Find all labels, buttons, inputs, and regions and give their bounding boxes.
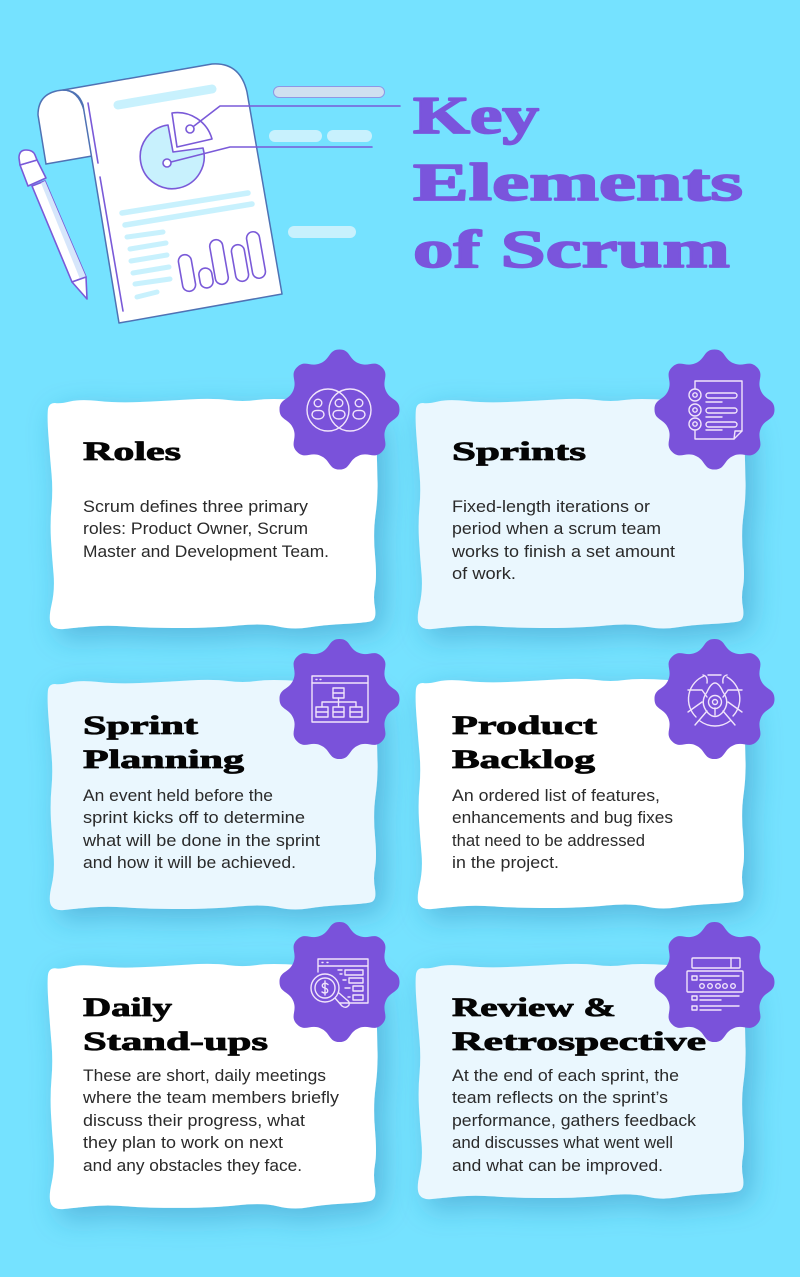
heading: Retrospective bbox=[452, 1027, 706, 1056]
heading: Backlog bbox=[452, 745, 595, 774]
panel: daily stand-ups bbox=[48, 922, 399, 1209]
icon: star rating form bbox=[654, 922, 774, 1042]
pencil bbox=[19, 150, 87, 299]
body text: that need to be addressed bbox=[452, 832, 645, 850]
body text: roles: Product Owner, Scrum bbox=[83, 520, 308, 538]
title bbox=[413, 87, 743, 279]
body text: and discusses what went well bbox=[452, 1134, 673, 1152]
panel: product backlog bbox=[416, 639, 774, 909]
body text: Fixed-length iterations or bbox=[452, 498, 651, 516]
icon: sitemap window bbox=[280, 639, 400, 759]
bar chart bbox=[177, 231, 266, 292]
icon: bug in target bbox=[654, 639, 774, 759]
body text: Master and Development Team. bbox=[83, 543, 329, 561]
illustration: report document and pencil bbox=[19, 64, 400, 323]
heading: Product bbox=[452, 711, 598, 740]
body text: At the end of each sprint, the bbox=[452, 1067, 679, 1085]
panel: sprints bbox=[416, 350, 774, 629]
body text: they plan to work on next bbox=[83, 1134, 283, 1152]
card background bbox=[48, 680, 378, 910]
heading: Roles bbox=[83, 437, 181, 466]
leader lines bbox=[163, 106, 400, 167]
decorative pills bbox=[269, 86, 384, 238]
heading: Review & bbox=[452, 993, 616, 1022]
pie chart bbox=[140, 113, 212, 189]
heading: Daily bbox=[83, 993, 172, 1022]
heading bbox=[452, 711, 598, 774]
panel: sprint planning bbox=[48, 639, 399, 910]
body text: what will be done in the sprint bbox=[82, 832, 320, 850]
body text bbox=[83, 498, 329, 561]
body text: works to finish a set amount bbox=[451, 543, 675, 561]
title: Elements bbox=[413, 154, 743, 212]
body text: These are short, daily meetings bbox=[83, 1067, 326, 1085]
paper bbox=[38, 64, 282, 323]
body text: in the project. bbox=[452, 854, 559, 872]
panel: roles bbox=[48, 350, 399, 629]
heading: Stand-ups bbox=[83, 1027, 268, 1056]
card background bbox=[416, 679, 746, 909]
panel: review and retrospective bbox=[416, 922, 774, 1199]
body text: team reflects on the sprint’s bbox=[452, 1089, 668, 1107]
icon: overlapping people bbox=[280, 350, 400, 470]
body text: and how it will be achieved. bbox=[83, 854, 296, 872]
card background bbox=[416, 399, 746, 629]
body text: An ordered list of features, bbox=[452, 787, 660, 805]
body text bbox=[452, 787, 673, 872]
body text: and any obstacles they face. bbox=[83, 1157, 302, 1175]
icon: checklist document bbox=[654, 350, 774, 470]
body text: discuss their progress, what bbox=[83, 1112, 305, 1130]
body text bbox=[452, 1067, 697, 1175]
body text: where the team members briefly bbox=[82, 1089, 340, 1107]
body text: sprint kicks off to determine bbox=[83, 809, 305, 827]
body text: Scrum defines three primary bbox=[83, 498, 309, 516]
body text: of work. bbox=[452, 565, 516, 583]
body text: performance, gathers feedback bbox=[452, 1112, 697, 1130]
card background bbox=[416, 964, 746, 1199]
heading bbox=[452, 993, 706, 1056]
body text: and what can be improved. bbox=[452, 1157, 663, 1175]
heading: Sprints bbox=[452, 437, 586, 466]
body text bbox=[82, 787, 320, 872]
body text bbox=[82, 1067, 340, 1175]
title: Key bbox=[413, 87, 539, 145]
body text: enhancements and bug fixes bbox=[452, 809, 673, 827]
card background bbox=[48, 964, 378, 1209]
title: of Scrum bbox=[413, 221, 730, 279]
heading bbox=[83, 993, 268, 1056]
heading: Planning bbox=[83, 745, 244, 774]
card background bbox=[48, 399, 378, 629]
heading: Sprint bbox=[83, 711, 199, 740]
body text: An event held before the bbox=[83, 787, 273, 805]
heading bbox=[83, 711, 244, 774]
body text bbox=[451, 498, 675, 583]
icon: magnifier on report bbox=[280, 922, 400, 1042]
body text: period when a scrum team bbox=[452, 520, 661, 538]
